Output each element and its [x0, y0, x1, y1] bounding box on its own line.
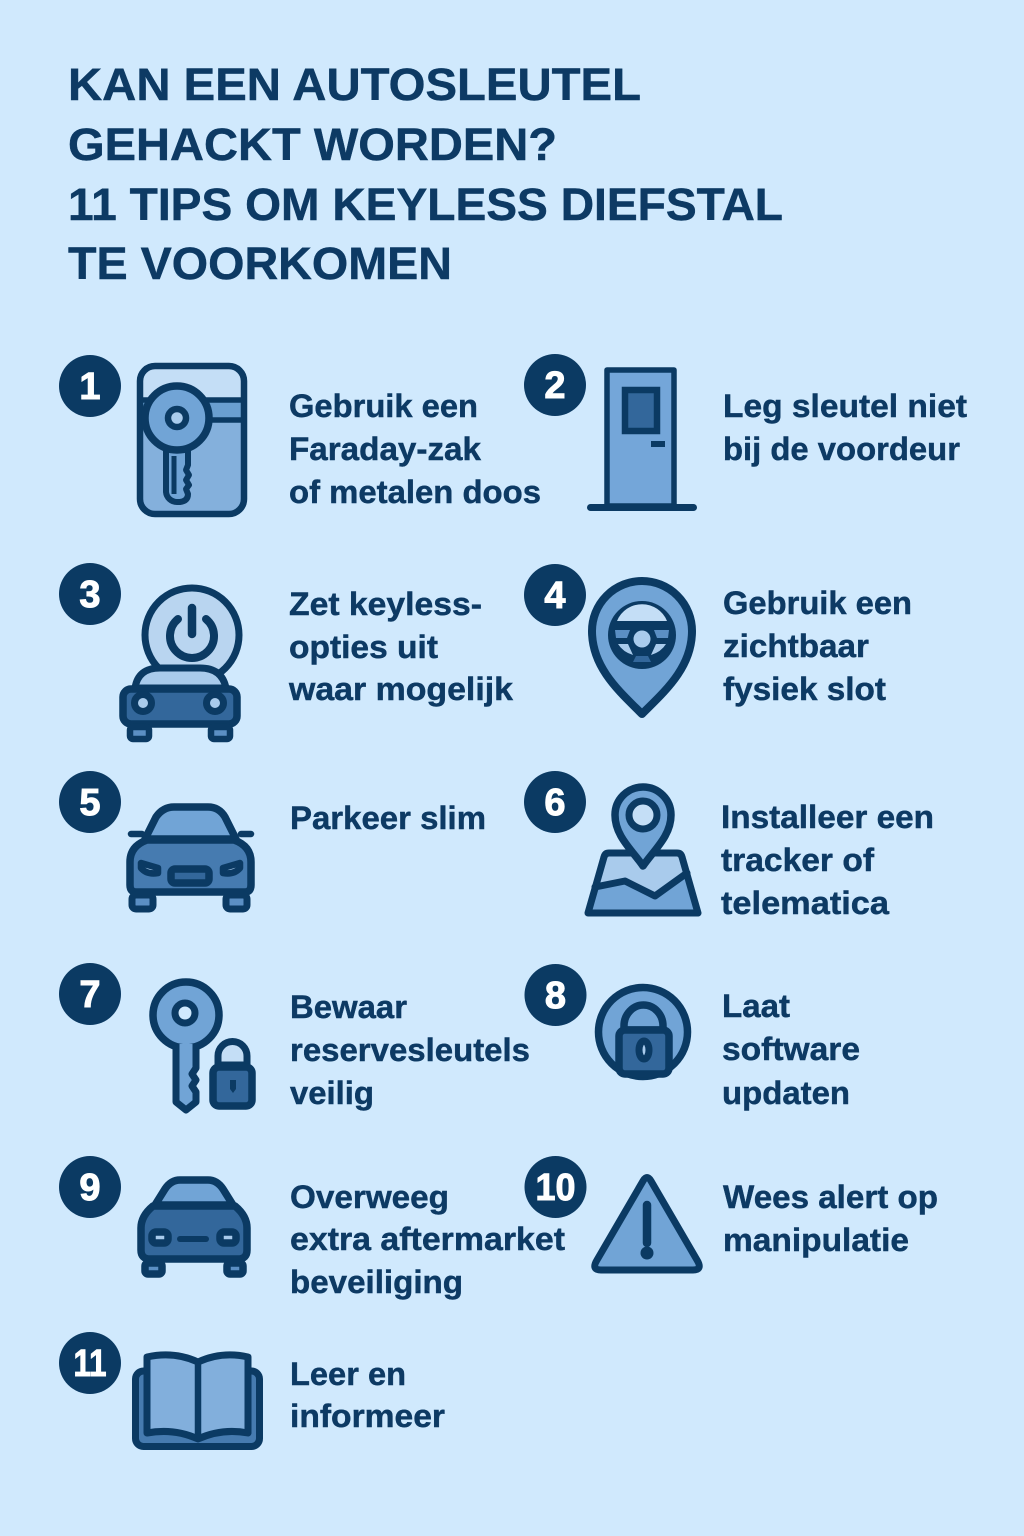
label 4: zichtbaar: [723, 628, 869, 664]
label 4: [723, 585, 912, 707]
number badge 6: [524, 771, 586, 833]
tip 7: spare keys safe: [59, 963, 530, 1111]
number badge 1: 1: [79, 366, 101, 408]
label 10: manipulatie: [723, 1222, 909, 1258]
number badge 1: [59, 355, 121, 417]
tip 2: key away from front door: [524, 354, 967, 511]
label 7: [290, 989, 530, 1111]
title: [68, 59, 783, 289]
icon: map with location pin: [588, 787, 698, 913]
tip 3: switch off keyless: [59, 563, 514, 739]
number badge 2: [524, 354, 586, 416]
icon: car front compact: [141, 1180, 247, 1274]
number badge 11: [59, 1332, 121, 1394]
tip 6: tracker or telematics: [524, 771, 934, 921]
number badge 4: 4: [544, 575, 566, 617]
label 8: Laat: [722, 988, 790, 1024]
number badge 10: [524, 1156, 586, 1218]
number badge 9: [59, 1156, 121, 1218]
label 2: [723, 388, 967, 467]
number badge 2: 2: [544, 365, 566, 407]
label 11: informeer: [290, 1398, 445, 1434]
tip 9: aftermarket security: [59, 1156, 565, 1300]
label 8: software: [722, 1031, 860, 1067]
number badge 3: 3: [79, 574, 101, 616]
tip 10: watch for tampering: [524, 1156, 938, 1270]
label 6: telematica: [721, 885, 890, 921]
number badge 7: [59, 963, 121, 1025]
label 3: [288, 586, 514, 707]
number badge 11: 11: [74, 1343, 106, 1385]
label 8: updaten: [722, 1075, 850, 1111]
number badge 6: 6: [544, 782, 566, 824]
number badge 5: 5: [79, 782, 101, 824]
label 11: Leer en: [290, 1356, 406, 1392]
label 7: veilig: [290, 1075, 374, 1111]
label 9: beveiliging: [290, 1264, 463, 1300]
icon: steering wheel in pin: [592, 581, 692, 714]
number badge 8: [524, 964, 586, 1026]
label 7: reservesleutels: [290, 1032, 530, 1068]
label 7: Bewaar: [290, 989, 407, 1025]
label 1: of metalen doos: [289, 474, 541, 510]
number badge 4: [524, 564, 586, 626]
label 9: [290, 1179, 565, 1300]
title: 11 TIPS OM KEYLESS DIEFSTAL: [68, 179, 783, 230]
icon: warning triangle: [595, 1178, 699, 1270]
icon: key and padlock: [153, 982, 252, 1110]
label 6: tracker of: [721, 842, 874, 878]
icon: front door: [587, 370, 697, 511]
number badge 10: 10: [536, 1167, 576, 1209]
label 2: bij de voordeur: [723, 431, 960, 467]
label 1: Faraday-zak: [289, 431, 482, 467]
title: GEHACKT WORDEN?: [68, 119, 557, 170]
number badge 9: 9: [79, 1167, 101, 1209]
label 10: [723, 1179, 938, 1258]
number badge 7: 7: [79, 974, 101, 1016]
label 4: Gebruik een: [723, 585, 912, 621]
tip 4: visible physical lock: [524, 564, 912, 714]
label 3: opties uit: [289, 629, 438, 665]
label 1: [289, 388, 541, 510]
label 5: Parkeer slim: [290, 800, 486, 836]
icon: key in Faraday pouch: [140, 366, 244, 514]
number badge 8: 8: [545, 975, 566, 1017]
label 11: [290, 1356, 445, 1434]
icon: car front: [130, 807, 251, 909]
tip 1: Faraday bag: [59, 355, 541, 514]
tip 5: park smart: [59, 771, 486, 909]
label 6: [721, 799, 934, 921]
icon: open book: [136, 1355, 260, 1446]
icon: power button and car: [123, 588, 239, 739]
label 9: Overweeg: [290, 1179, 449, 1215]
label 1: Gebruik een: [289, 388, 478, 424]
label 4: fysiek slot: [723, 671, 886, 707]
label 2: Leg sleutel niet: [723, 388, 967, 424]
number badge 5: [59, 771, 121, 833]
label 6: Installeer een: [721, 799, 934, 835]
title: KAN EEN AUTOSLEUTEL: [68, 59, 641, 110]
label 8: [722, 988, 860, 1111]
tip 11: learn and inform: [59, 1332, 445, 1446]
tip 8: software updates: [524, 964, 860, 1111]
label 3: waar mogelijk: [288, 671, 514, 707]
number badge 3: [59, 563, 121, 625]
title: TE VOORKOMEN: [68, 238, 452, 289]
label 10: Wees alert op: [723, 1179, 938, 1215]
label 3: Zet keyless-: [289, 586, 482, 622]
icon: padlock in circle: [598, 988, 688, 1076]
label 9: extra aftermarket: [290, 1221, 565, 1257]
